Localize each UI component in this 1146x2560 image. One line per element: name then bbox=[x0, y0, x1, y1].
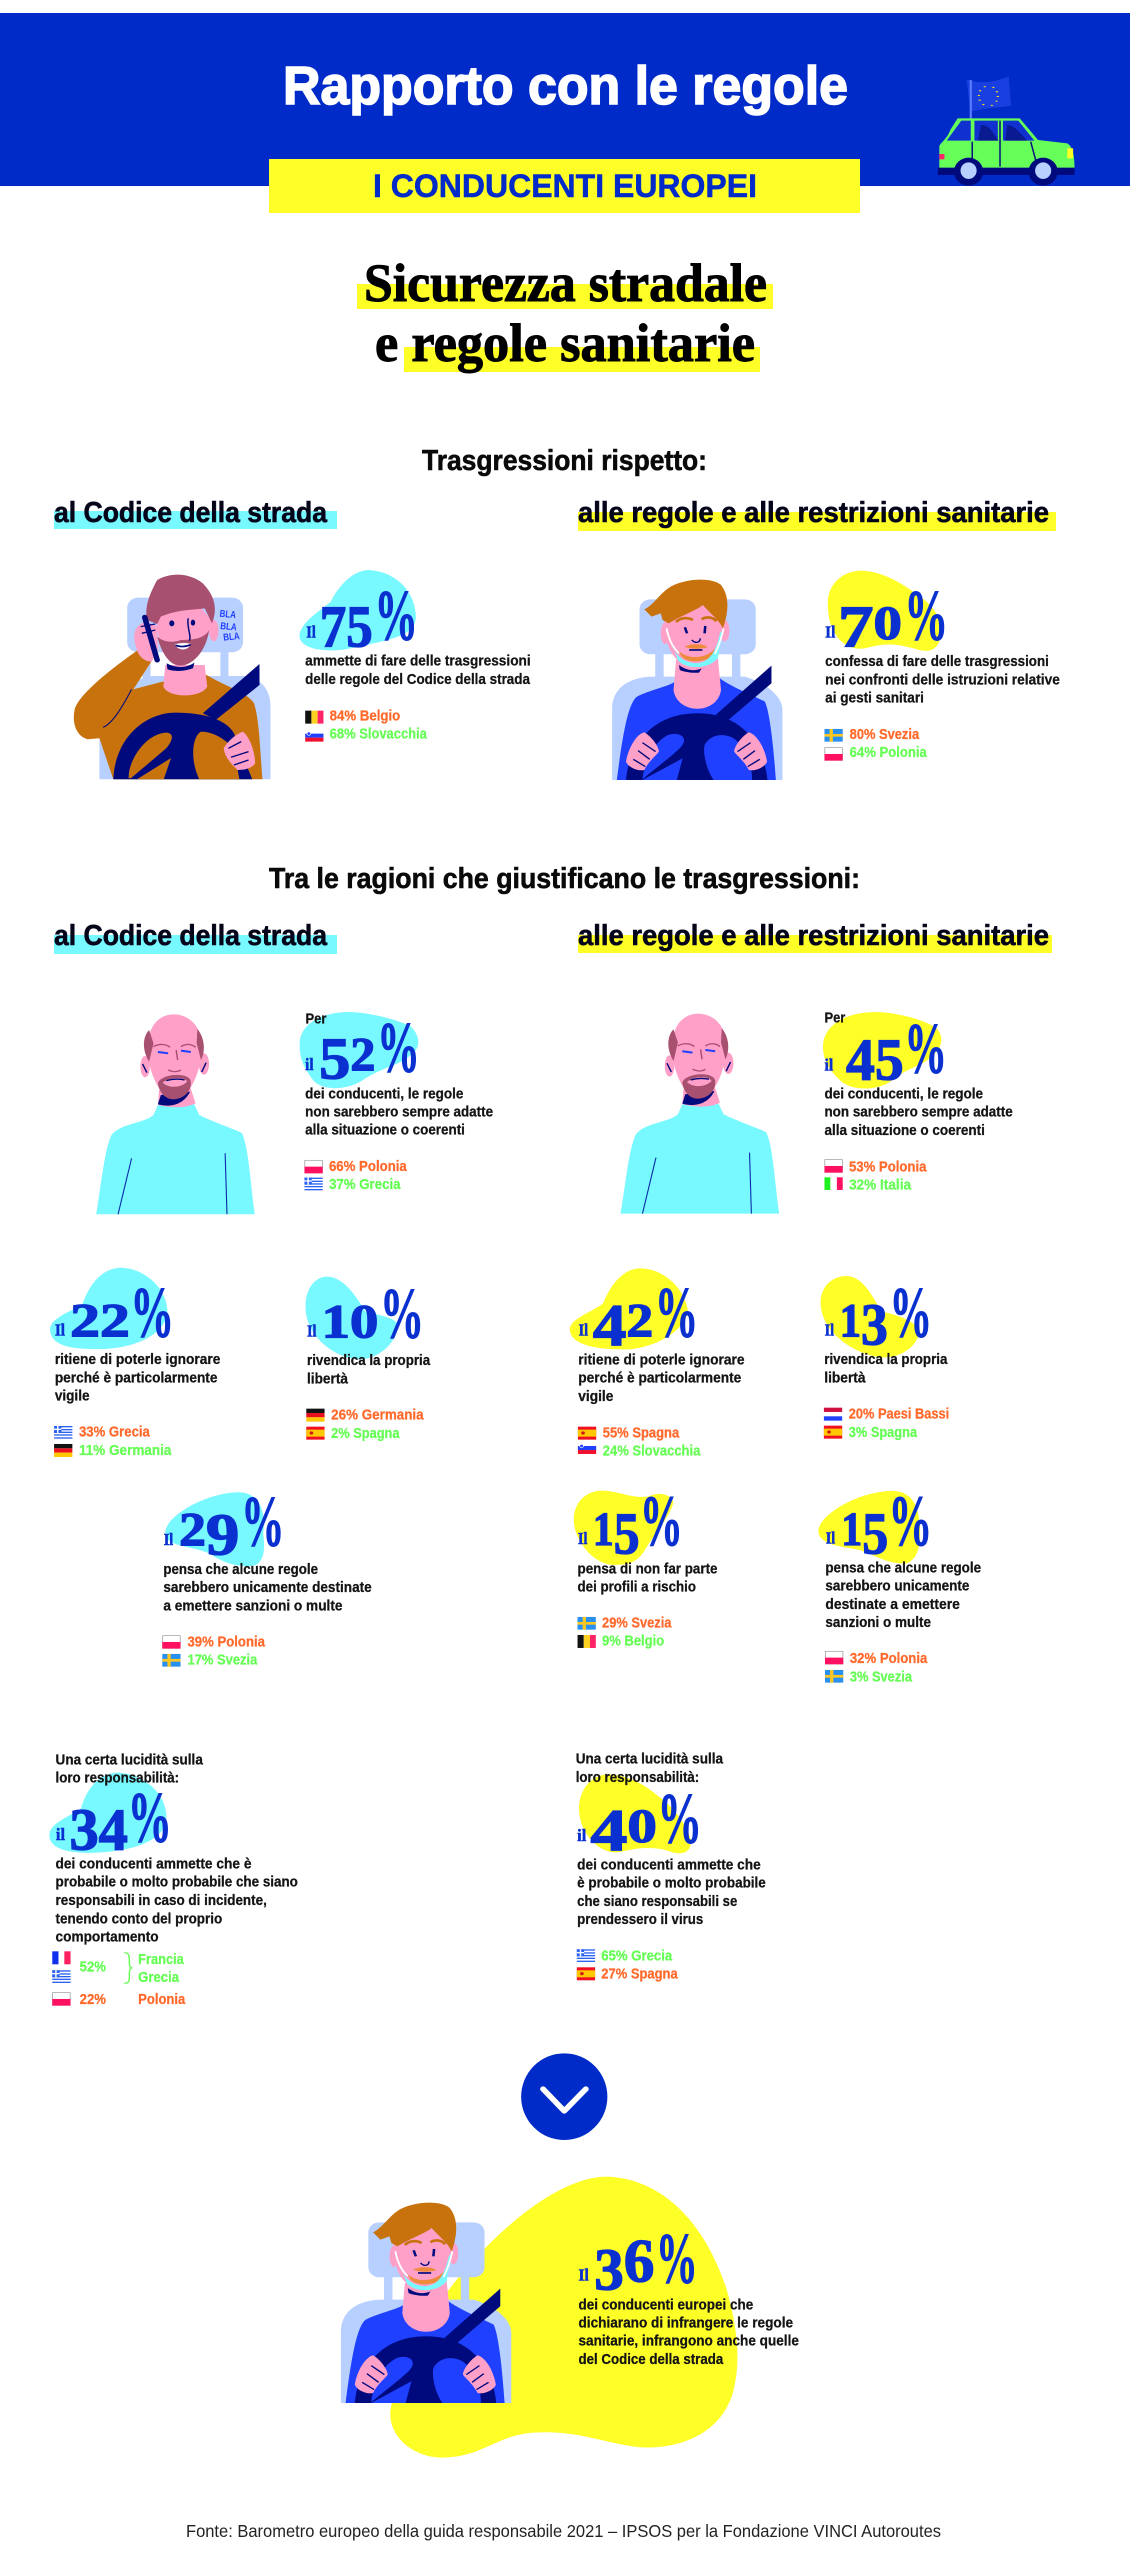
stat card: 45%: % bbox=[905, 1009, 947, 1089]
stat card: 15% sanzioni: 32% Polonia bbox=[850, 1651, 928, 1667]
stat card: 45%: 4 bbox=[846, 1028, 875, 1093]
stat card: 34% bbox=[49, 1752, 298, 2008]
stat card: 34%: 4 bbox=[99, 1798, 128, 1863]
stat card: 52%: 37% Grecia bbox=[329, 1177, 401, 1193]
stat card: 70%: 64% Polonia bbox=[850, 745, 927, 761]
stat card: 34%: Polonia bbox=[138, 1992, 186, 2008]
stat card: 10%: Il bbox=[307, 1321, 317, 1340]
stat card: 34%: dei conducenti ammette che è bbox=[56, 1856, 252, 1872]
stat card: 29% bbox=[162, 1483, 372, 1668]
stat card: 75%: ammette di fare delle trasgressioni bbox=[305, 653, 531, 669]
stat card: 22%: Il bbox=[55, 1320, 65, 1339]
stat card: 13%: libertà bbox=[824, 1370, 866, 1386]
stat card: 70% bbox=[824, 571, 1060, 761]
stat card: 75%: 84% Belgio bbox=[330, 708, 400, 724]
stat card: 40%: è probabile o molto probabile bbox=[577, 1875, 766, 1891]
stat card: 10%: libertà bbox=[307, 1371, 348, 1387]
stat card: 75%: 68% Slovacchia bbox=[330, 726, 427, 742]
stat card: 15% sanzioni: % bbox=[889, 1482, 932, 1561]
stat card: 22%: % bbox=[130, 1274, 174, 1353]
illustration: driver on phone: BLA bbox=[220, 621, 238, 633]
stat card: 45%: 53% Polonia bbox=[849, 1159, 927, 1175]
column heading: regole sanitarie: alle regole e alle restrizioni sanitarie bbox=[578, 497, 1049, 529]
stat card: 42%: 55% Spagna bbox=[603, 1425, 680, 1441]
stat card: 75%: delle regole del Codice della strada bbox=[305, 672, 530, 688]
section heading: trasgressioni: Trasgressioni rispetto: bbox=[422, 445, 707, 477]
stat card: 10%: 26% Germania bbox=[331, 1407, 424, 1423]
stat card: 45%: Per bbox=[824, 1010, 845, 1026]
stat card: 15% sanzioni: 1 bbox=[841, 1503, 862, 1555]
stat card: 34%: comportamento bbox=[56, 1929, 159, 1945]
stat card: 13%: 3% Spagna bbox=[849, 1425, 917, 1441]
stat card: 10%: 2% Spagna bbox=[331, 1426, 400, 1442]
stat card: 75%: 7 bbox=[320, 595, 346, 660]
stat card: 13%: 20% Paesi Bassi bbox=[849, 1406, 949, 1422]
stat card: 13%: % bbox=[890, 1274, 932, 1353]
stat card: 70%: 7 bbox=[838, 595, 874, 660]
illustration: driver on phone bbox=[74, 575, 270, 779]
stat card: 34%: 3 bbox=[69, 1798, 99, 1863]
stat card: 29%: pensa che alcune regole bbox=[163, 1562, 318, 1578]
stat card: 40%: 27% Spagna bbox=[601, 1966, 678, 1982]
stat card: 45%: alla situazione o coerenti bbox=[824, 1123, 985, 1139]
main heading bbox=[357, 253, 773, 373]
stat card: 34%: responsabili in caso di incidente, bbox=[56, 1893, 267, 1909]
stat card: 15% profili a rischio: 5 bbox=[614, 1502, 640, 1567]
main heading: Sicurezza stradale bbox=[364, 253, 767, 313]
stat card: 34%: % bbox=[128, 1779, 172, 1858]
illustration: driver with lowered mask, conclusion bbox=[341, 2203, 511, 2403]
main heading: e regole sanitarie bbox=[375, 313, 755, 373]
stat card: 40%: 65% Grecia bbox=[601, 1948, 673, 1964]
stat card: 22% bbox=[50, 1268, 221, 1459]
stat card: 15% profili a rischio bbox=[574, 1482, 718, 1649]
section heading: ragioni: Tra le ragioni che giustificano le trasgressioni: bbox=[269, 863, 860, 895]
stat card: 42%: Il bbox=[579, 1320, 588, 1339]
stat card: 42%: 2 bbox=[626, 1295, 653, 1347]
stat card: 29%: 9 bbox=[206, 1503, 239, 1568]
stat card: 15% sanzioni: 3% Svezia bbox=[850, 1669, 912, 1685]
stat card: 40%: il bbox=[577, 1826, 586, 1845]
stat card: 70%: % bbox=[905, 576, 948, 656]
stat card: 10%: 1 bbox=[322, 1295, 350, 1348]
stat card: 40%: 0 bbox=[627, 1800, 657, 1852]
stat card: 34%: Grecia bbox=[138, 1970, 179, 1986]
stat card: 34%: 52% bbox=[80, 1959, 106, 1975]
stat card: 42%: vigile bbox=[578, 1389, 614, 1405]
illustration: driver with lowered mask bbox=[612, 580, 782, 780]
stat card: 13% bbox=[821, 1274, 949, 1441]
stat card: 34%: Francia bbox=[138, 1952, 184, 1968]
title: Rapporto con le regole bbox=[283, 56, 848, 116]
stat card: 40%: 4 bbox=[590, 1799, 627, 1863]
stat card: 15% sanzioni: sarebbero unicamente bbox=[825, 1578, 970, 1594]
subtitle bar bbox=[269, 159, 860, 213]
stat card: 42%: % bbox=[655, 1274, 698, 1353]
stat card: 36% bbox=[579, 2220, 799, 2368]
stat card: 70%: confessa di fare delle trasgressioni bbox=[825, 654, 1049, 670]
stat card: 22%: vigile bbox=[55, 1388, 90, 1404]
stat card: 15% profili a rischio: Il bbox=[578, 1529, 588, 1548]
stat card: 36%: 3 bbox=[594, 2238, 624, 2303]
stat card: 52%: 5 bbox=[319, 1027, 350, 1092]
stat card: 40%: che siano responsabili se bbox=[577, 1894, 738, 1910]
stat card: 52%: dei conducenti, le regole bbox=[305, 1086, 464, 1102]
stat card: 34%: probabile o molto probabile che siano bbox=[56, 1874, 298, 1890]
column heading: regole sanitarie 2: alle regole e alle restrizioni sanitarie bbox=[578, 920, 1049, 952]
stat card: 52%: 66% Polonia bbox=[329, 1159, 407, 1175]
stat card: 52%: il bbox=[305, 1055, 314, 1074]
stat card: 15% profili a rischio: 1 bbox=[593, 1503, 614, 1555]
stat card: 15% profili a rischio: pensa di non far parte bbox=[578, 1561, 718, 1577]
stat card: 45%: 32% Italia bbox=[849, 1177, 911, 1193]
stat card: 75%: 5 bbox=[346, 595, 373, 660]
stat card: 40%: dei conducenti ammette che bbox=[577, 1857, 761, 1873]
stat card: 45%: 5 bbox=[875, 1028, 904, 1093]
stat card: 15% sanzioni: Il bbox=[826, 1528, 835, 1547]
stat card: 15% profili a rischio: 9% Belgio bbox=[602, 1633, 664, 1649]
stat card: 22%: perché è particolarmente bbox=[55, 1370, 218, 1386]
stat card: 75%: % bbox=[375, 576, 418, 656]
stat card: 70%: 0 bbox=[874, 597, 902, 649]
icon: chevron down bbox=[521, 2053, 607, 2140]
stat card: 42%: ritiene di poterle ignorare bbox=[578, 1352, 745, 1368]
stat card: 13%: Il bbox=[825, 1320, 834, 1339]
stat card: 45%: il bbox=[824, 1055, 833, 1074]
stat card: 75% bbox=[299, 570, 531, 742]
stat card: 15% sanzioni: pensa che alcune regole bbox=[825, 1560, 981, 1576]
stat card: 42%: perché è particolarmente bbox=[578, 1370, 742, 1386]
panel: conclusion blob bbox=[390, 2177, 737, 2458]
illustration: driver on phone: BLA bbox=[219, 609, 237, 621]
stat card: 70%: nei confronti delle istruzioni relative bbox=[825, 672, 1060, 688]
stat card: 34%: tenendo conto del proprio bbox=[56, 1911, 222, 1927]
stat card: 22%: 2 bbox=[70, 1295, 100, 1347]
stat card: 22%: 2 bbox=[100, 1295, 130, 1347]
stat card: 15% sanzioni: 5 bbox=[862, 1502, 888, 1567]
stat card: 52%: non sarebbero sempre adatte bbox=[305, 1104, 493, 1120]
stat card: 40%: % bbox=[658, 1780, 702, 1859]
stat card: 70%: 80% Svezia bbox=[850, 727, 919, 743]
stat card: 29%: 2 bbox=[179, 1504, 206, 1556]
stat card: 22%: 33% Grecia bbox=[79, 1424, 150, 1440]
stat card: 29%: sarebbero unicamente destinate bbox=[163, 1580, 372, 1596]
stat card: 36%: % bbox=[656, 2220, 698, 2299]
stat card: 15% profili a rischio: % bbox=[640, 1482, 683, 1561]
stat card: 70%: ai gesti sanitari bbox=[825, 690, 924, 706]
illustration: bald man right bbox=[621, 1014, 779, 1214]
column heading: codice della strada 2: al Codice della strada bbox=[54, 920, 328, 952]
illustration: bald man left bbox=[96, 1014, 255, 1214]
stat card: 29%: a emettere sanzioni o multe bbox=[163, 1598, 343, 1614]
stat card: 45%: non sarebbero sempre adatte bbox=[824, 1104, 1013, 1120]
stat card: 36%: dichiarano di infrangere le regole bbox=[579, 2315, 793, 2331]
subtitle bar: I CONDUCENTI EUROPEI bbox=[373, 168, 757, 204]
stat card: 29%: Il bbox=[164, 1530, 173, 1549]
stat card: 42%: 4 bbox=[593, 1294, 626, 1358]
stat card: 15% sanzioni bbox=[818, 1482, 981, 1685]
stat card: 34%: il bbox=[56, 1825, 65, 1844]
stat card: 70%: Il bbox=[825, 622, 836, 641]
stat card: 13%: 3 bbox=[861, 1293, 888, 1358]
stat card: 10%: rivendica la propria bbox=[307, 1353, 431, 1369]
stat card: 29%: 39% Polonia bbox=[188, 1634, 265, 1650]
stat card: 34%: Una certa lucidità sulla bbox=[56, 1752, 203, 1768]
icon: green car with EU flag bbox=[938, 77, 1075, 186]
stat card: 52%: 2 bbox=[350, 1029, 375, 1081]
stat card: 40% bbox=[576, 1751, 766, 1982]
stat card: 15% sanzioni: destinate a emettere bbox=[825, 1597, 960, 1613]
stat card: 36%: sanitarie, infrangono anche quelle bbox=[579, 2333, 799, 2349]
stat card: 15% profili a rischio: 29% Svezia bbox=[602, 1615, 672, 1631]
stat card: 36%: del Codice della strada bbox=[579, 2352, 724, 2368]
stat card: 75%: Il bbox=[306, 622, 316, 641]
stat card: 10%: 0 bbox=[350, 1295, 378, 1348]
stat card: 40%: loro responsabilità: bbox=[576, 1770, 699, 1786]
stat card: 36%: 6 bbox=[624, 2226, 655, 2295]
stat card: 36%: Il bbox=[579, 2265, 589, 2284]
stat card: 40%: prendessero il virus bbox=[577, 1912, 703, 1928]
stat card: 34%: loro responsabilità: bbox=[56, 1770, 179, 1786]
stat card: 52%: Per bbox=[306, 1011, 326, 1027]
header banner bbox=[0, 13, 1130, 186]
stat card: 10% bbox=[306, 1274, 431, 1442]
stat card: 42% bbox=[570, 1268, 745, 1459]
stat card: 34%: 22% bbox=[80, 1992, 106, 2008]
stat card: 52%: % bbox=[377, 1009, 420, 1088]
stat card: 29%: % bbox=[241, 1483, 284, 1562]
stat card: 45% bbox=[823, 1009, 1013, 1193]
stat card: 52%: alla situazione o coerenti bbox=[305, 1122, 465, 1138]
illustration: driver on phone: BLA bbox=[223, 631, 241, 643]
stat card: 10%: % bbox=[380, 1274, 424, 1354]
stat card: 13%: rivendica la propria bbox=[824, 1352, 948, 1368]
stat card: 13%: 1 bbox=[840, 1295, 861, 1347]
stat card: 52% bbox=[300, 1009, 493, 1193]
stat card: 40%: Una certa lucidità sulla bbox=[576, 1751, 723, 1767]
stat card: 22%: ritiene di poterle ignorare bbox=[55, 1352, 221, 1368]
stat card: 22%: 11% Germania bbox=[79, 1443, 172, 1459]
stat card: 42%: 24% Slovacchia bbox=[603, 1443, 701, 1459]
stat card: 36%: dei conducenti europei che bbox=[579, 2297, 754, 2313]
stat card: 15% sanzioni: sanzioni o multe bbox=[825, 1615, 931, 1631]
source footer: Fonte: Barometro europeo della guida responsabile 2021 – IPSOS per la Fondazione VINCI Autoroutes bbox=[186, 2521, 941, 2541]
stat card: 45%: dei conducenti, le regole bbox=[824, 1086, 983, 1102]
stat card: 15% profili a rischio: dei profili a rischio bbox=[578, 1579, 696, 1595]
stat card: 29%: 17% Svezia bbox=[188, 1652, 258, 1668]
column heading: codice della strada: al Codice della strada bbox=[54, 497, 328, 529]
